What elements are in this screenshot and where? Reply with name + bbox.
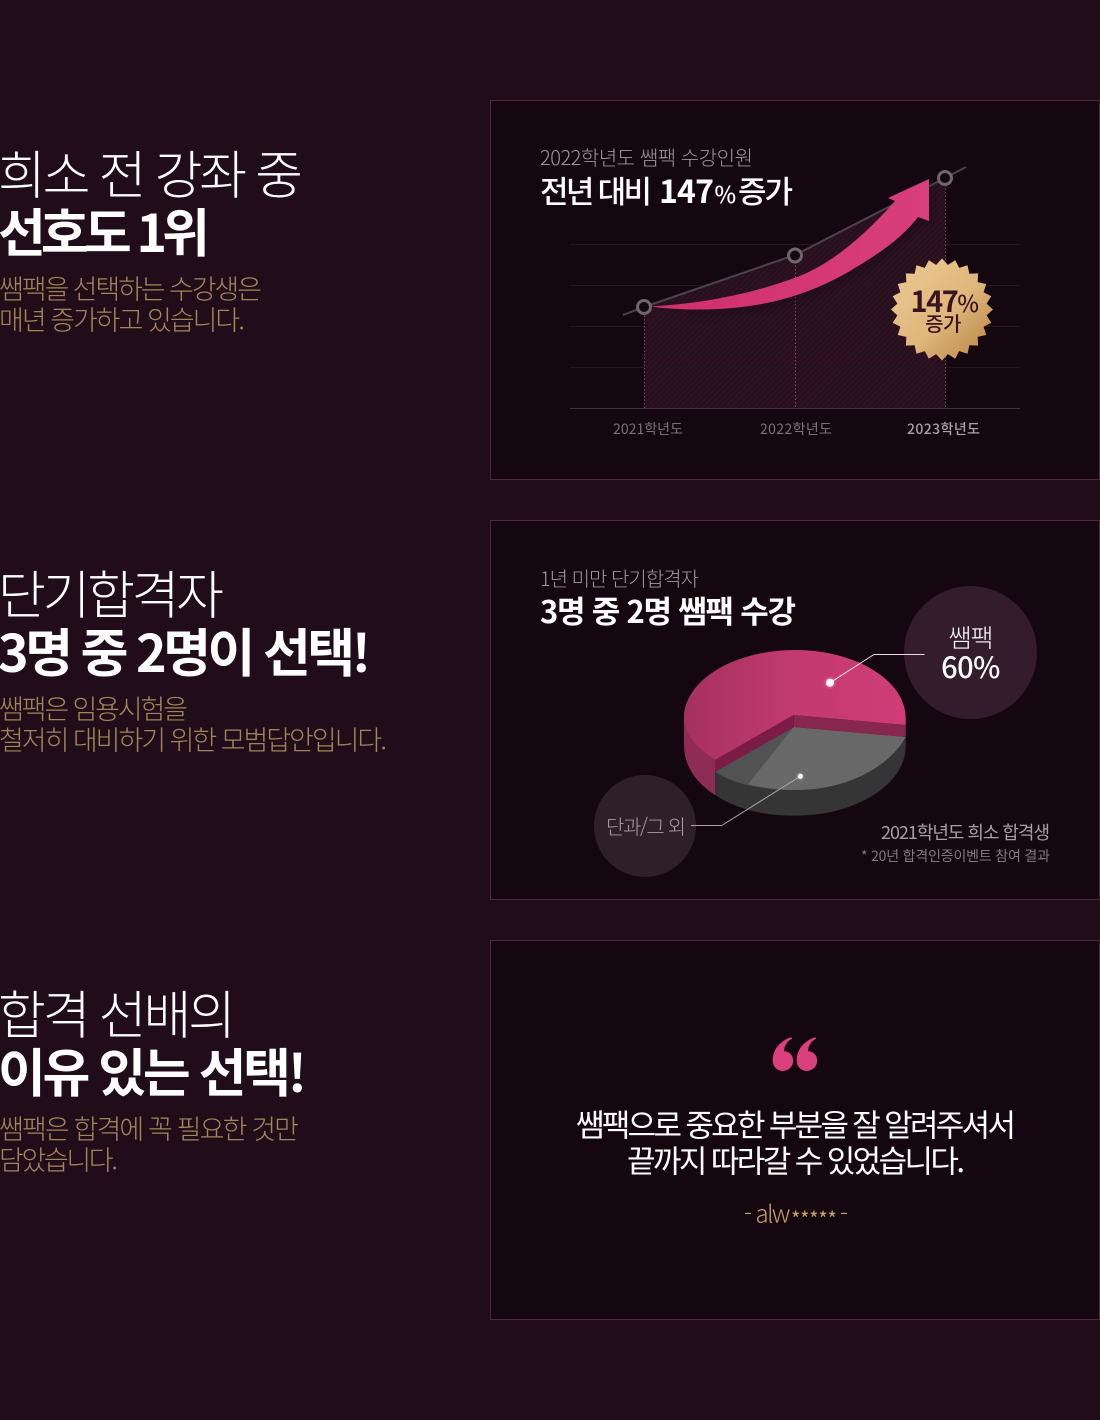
source note: * 20년 합격인증이벤트 참여 결과 bbox=[861, 846, 1050, 866]
grey slice side bbox=[715, 737, 906, 816]
callout bubble: 단과/그 외 bbox=[594, 775, 696, 877]
panel subtitle: 2022학년도 쌤팩 수강인원 bbox=[540, 142, 753, 171]
description text: 쌤팩은 임용시험을 bbox=[0, 688, 188, 727]
heading: 합격 선배의 이유 있는 선택!: 합격 선배의 bbox=[0, 974, 236, 1049]
callout bubble: 쌤팩 60% bbox=[904, 586, 1037, 719]
hatched area under line bbox=[644, 178, 945, 408]
description text: 쌤팩은 합격에 꼭 필요한 것만 bbox=[0, 1108, 299, 1147]
panel headline: % bbox=[714, 176, 736, 210]
source note bbox=[861, 819, 1050, 866]
icon: growth arrow bbox=[650, 179, 929, 310]
x-axis labels: 2023학년도 bbox=[907, 419, 980, 439]
pink slice top bbox=[684, 650, 906, 760]
data points bbox=[638, 172, 952, 314]
callout bubble: 단과/그 외: 단과/그 외 bbox=[606, 811, 686, 840]
description text bbox=[0, 688, 387, 758]
badge: 147% increase: 증가 bbox=[925, 308, 961, 337]
callout bubble: 쌤팩 60%: 쌤팩 bbox=[948, 619, 993, 655]
description text: 매년 증가하고 있습니다. bbox=[0, 299, 245, 338]
description text: 철저히 대비하기 위한 모범답안입니다. bbox=[0, 719, 387, 758]
x-axis labels: 2022학년도 bbox=[760, 419, 832, 439]
icon: quotation mark bbox=[773, 1037, 817, 1071]
badge: 147% increase bbox=[891, 258, 993, 360]
heading: 단기합격자 3명 중 2명이 선택! bbox=[0, 554, 371, 687]
panel headline: 증가 bbox=[738, 167, 793, 212]
quote text: 쌤팩으로 중요한 부분을 잘 알려주셔서 bbox=[576, 1100, 1016, 1146]
description text bbox=[0, 1108, 299, 1178]
panel headline: 3명 중 2명 쌤팩 수강 bbox=[540, 587, 796, 632]
callout line: 쌤팩 bbox=[823, 654, 924, 690]
heading: 희소 전 강좌 중 선호도 1위: 선호도 1위 bbox=[0, 192, 210, 267]
heading: 합격 선배의 이유 있는 선택! bbox=[0, 974, 307, 1107]
3D pie chart bbox=[684, 650, 906, 816]
panel headline bbox=[540, 167, 793, 213]
section 2 heading and copy bbox=[0, 554, 387, 758]
heading: 희소 전 강좌 중 선호도 1위 bbox=[0, 134, 303, 267]
panel: student testimonial bbox=[490, 940, 1100, 1320]
section 3 heading and copy bbox=[0, 974, 307, 1178]
quote author: - bbox=[840, 1194, 848, 1230]
badge: 147% increase: 147% bbox=[911, 279, 978, 321]
line chart bbox=[570, 167, 1020, 439]
grey slice top bbox=[715, 727, 906, 790]
description text: 쌤팩을 선택하는 수강생은 bbox=[0, 268, 262, 307]
pink slice inner walls bbox=[794, 715, 906, 737]
panel: enrollment growth chart bbox=[490, 100, 1100, 480]
panel subtitle: 1년 미만 단기합격자 bbox=[540, 563, 699, 592]
callout bubble: 쌤팩 60%: 60% bbox=[941, 645, 1000, 687]
x-axis labels bbox=[613, 419, 980, 439]
panel: pie chart of short-term passers bbox=[490, 520, 1100, 900]
heading: 합격 선배의 이유 있는 선택!: 이유 있는 선택! bbox=[0, 1032, 307, 1107]
quote author: - alw bbox=[744, 1194, 790, 1230]
trend line bbox=[623, 167, 966, 315]
quote text bbox=[576, 1100, 1016, 1182]
pink slice outer side bbox=[684, 716, 715, 795]
quote text: 끝까지 따라갈 수 있었습니다. bbox=[627, 1136, 965, 1182]
description text bbox=[0, 268, 262, 338]
source note: 2021학년도 희소 합격생 bbox=[881, 819, 1050, 845]
description text: 담았습니다. bbox=[0, 1139, 118, 1178]
heading: 희소 전 강좌 중 선호도 1위: 희소 전 강좌 중 bbox=[0, 134, 303, 209]
section 1 heading and copy bbox=[0, 134, 303, 338]
callout line: 단과/그 외 bbox=[691, 771, 805, 826]
x-axis labels: 2021학년도 bbox=[613, 419, 683, 439]
heading: 단기합격자 3명 중 2명이 선택!: 3명 중 2명이 선택! bbox=[0, 612, 371, 687]
quote author: ***** bbox=[791, 1204, 837, 1232]
panel headline: 전년 대비 bbox=[540, 167, 652, 212]
panel headline: 147 bbox=[659, 167, 714, 213]
heading: 단기합격자 3명 중 2명이 선택!: 단기합격자 bbox=[0, 554, 224, 629]
